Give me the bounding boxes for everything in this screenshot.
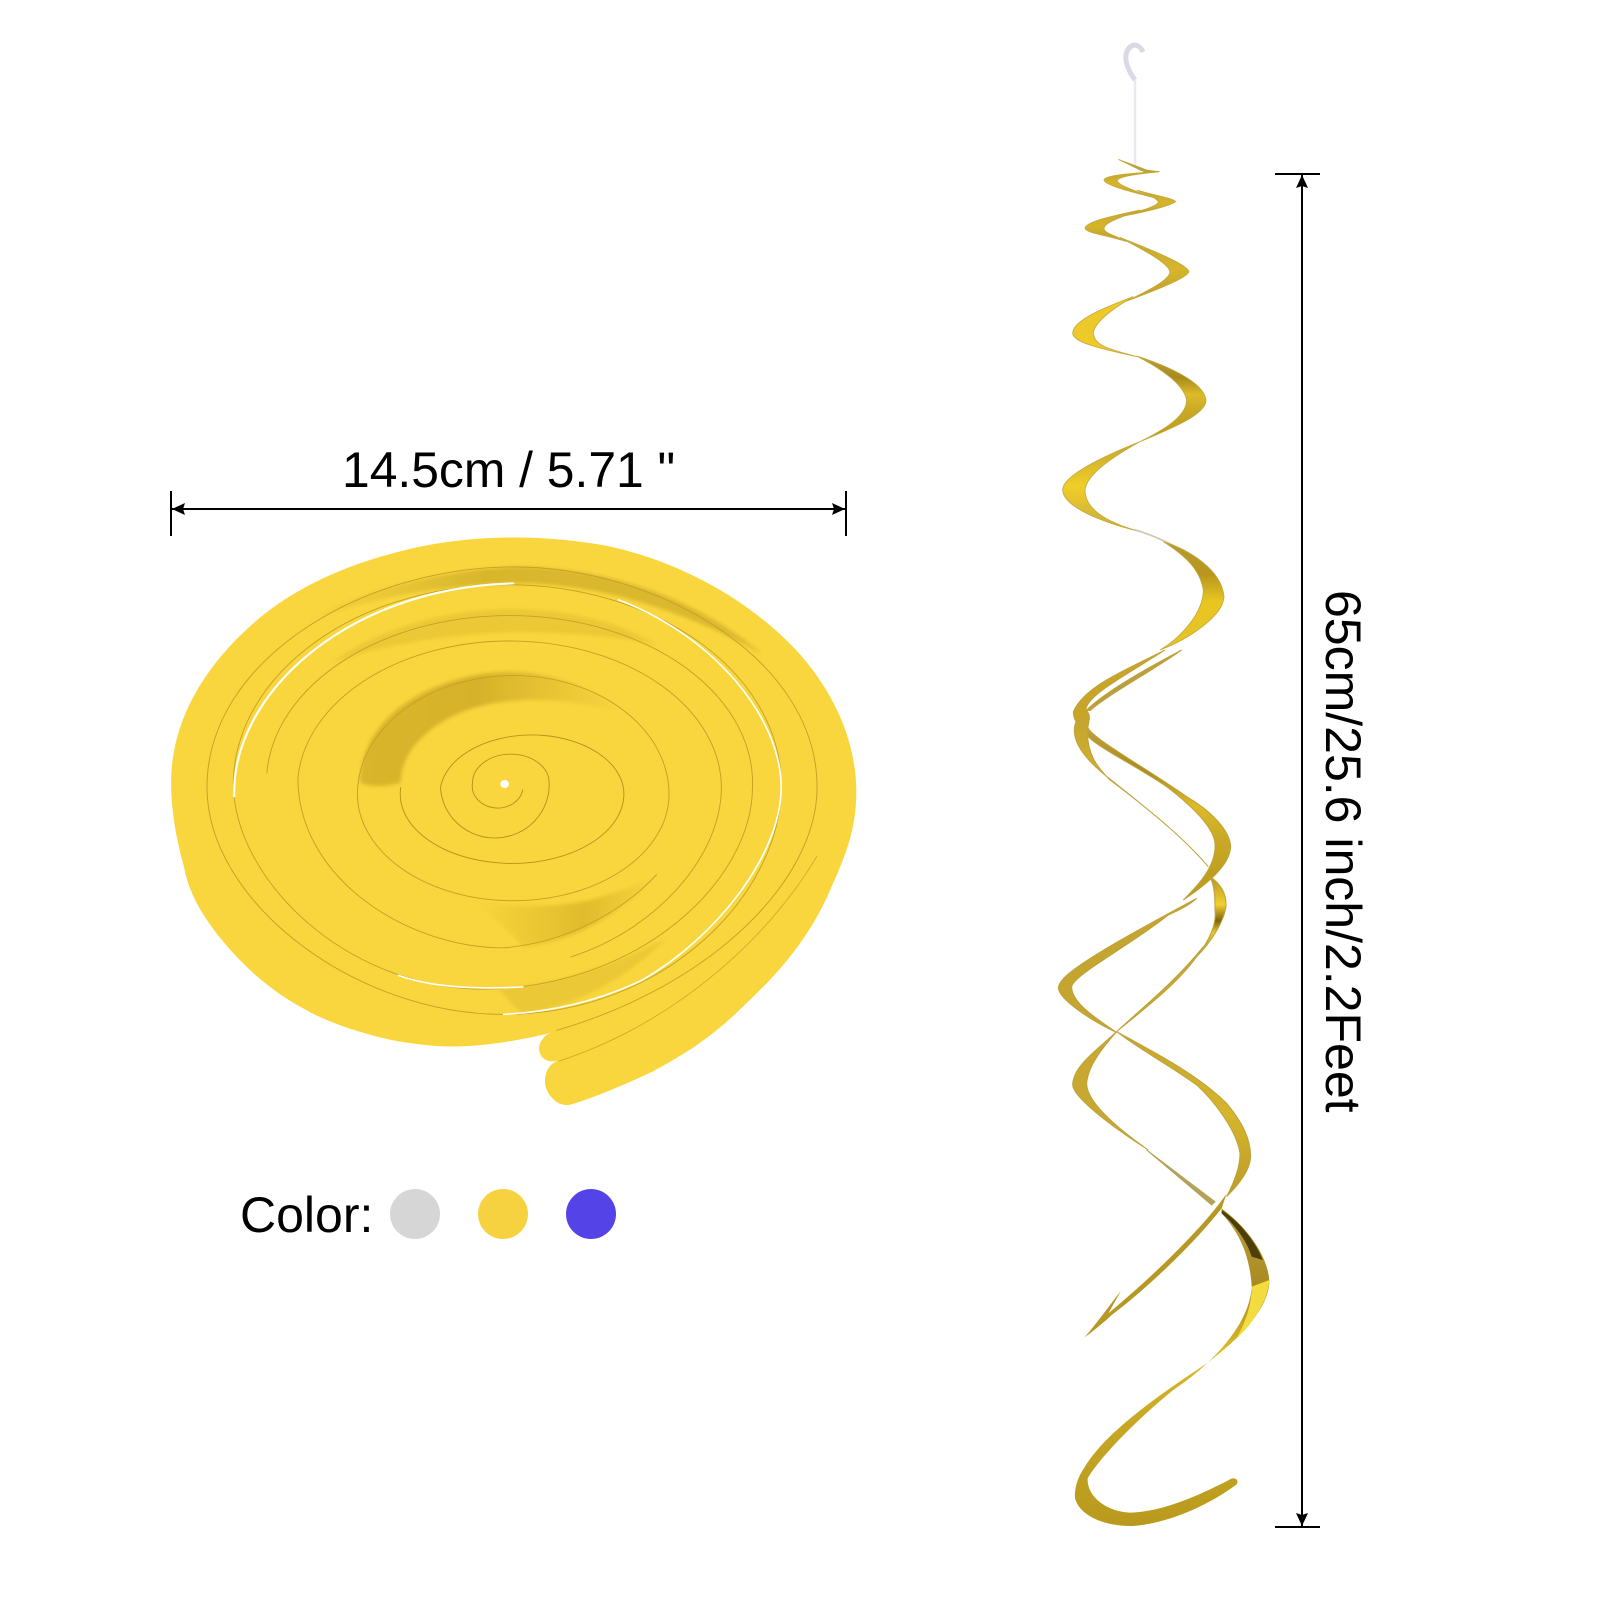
- color label: Color:: [240, 1187, 373, 1243]
- height label: 65cm/25.6 inch/2.2Feet: [1315, 590, 1371, 1113]
- flat gold spiral disc: [171, 538, 856, 1105]
- ribbon turns: lower middle section: [1058, 877, 1251, 1197]
- disc outline: [171, 538, 856, 1105]
- shaded band: bottom ring: [499, 939, 666, 1013]
- width label: 14.5cm / 5.71 ": [342, 442, 675, 498]
- ribbon turns: top section: [1073, 159, 1189, 357]
- soft shaded bands: [298, 567, 762, 1013]
- plastic hook: [1126, 45, 1143, 166]
- hanging gold swirl streamer: [1058, 45, 1269, 1526]
- bright highlight: [1237, 1280, 1269, 1338]
- shaded band: inner crescent: [360, 672, 623, 786]
- ribbon turns: upper middle section: [1063, 356, 1224, 650]
- spiral cut lines: [207, 567, 817, 1061]
- hooked tip: [1084, 1193, 1227, 1338]
- shaded band: upper ring: [331, 609, 657, 663]
- dark fold shadow: [1222, 1210, 1263, 1260]
- swatch: blue: [566, 1189, 616, 1239]
- bottom loop: [1075, 1208, 1269, 1526]
- white gaps: [234, 583, 781, 1014]
- shaded band: upper outer: [298, 567, 762, 654]
- swatch: gold: [478, 1189, 528, 1239]
- ribbon turns: double lobe section: [1073, 650, 1231, 900]
- swatch: silver: [390, 1189, 440, 1239]
- ribbon tail and bottom loop: [1075, 1150, 1269, 1526]
- shaded band: lower inner: [475, 874, 657, 947]
- color swatches: [240, 1187, 616, 1243]
- width dimension: 14.5cm / 5.71 in: [171, 442, 846, 536]
- height dimension: 65cm / 25.6 inch / 2.2 feet: [1275, 174, 1371, 1527]
- center hole: [500, 780, 509, 788]
